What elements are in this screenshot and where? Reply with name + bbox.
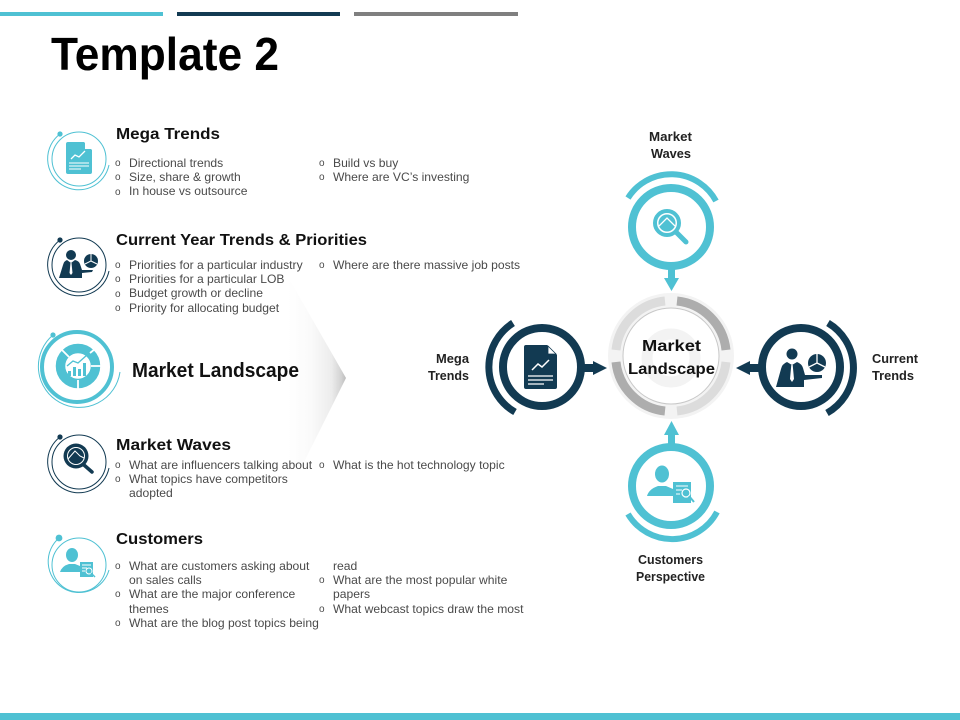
list: right column: What is the hot technology topic: [333, 458, 505, 472]
list: right column: [319, 156, 469, 184]
label: Waves: [651, 147, 691, 161]
chevron arrow: [288, 277, 346, 466]
node: mega trends: [428, 323, 607, 412]
list: right column: Where are VC’s investing: [333, 170, 469, 184]
label: Market: [649, 130, 693, 144]
list: right column: What webcast topics draw the most: [333, 602, 524, 616]
list: right column: Where are there massive job posts: [333, 258, 520, 272]
hub label: Market: [642, 338, 702, 355]
label: Mega: [436, 352, 470, 366]
list: left column: o: [115, 460, 121, 471]
icon: navy business person in rings: [48, 237, 109, 296]
label: [636, 553, 705, 584]
list: left column: What are the blog post topics being: [129, 616, 319, 630]
title: Template 2: [51, 28, 279, 80]
list: right column: Build vs buy: [333, 156, 399, 170]
list: left column: Priority for allocating budget: [129, 301, 280, 315]
list: right column: o: [319, 604, 325, 615]
icon: teal customer with document in rings: [48, 535, 109, 593]
list: left column: adopted: [129, 486, 173, 500]
icon: customer with document: [647, 466, 694, 503]
list: right column: papers: [333, 587, 370, 601]
list: left column: themes: [129, 602, 169, 616]
list: right column: o: [319, 260, 325, 271]
arrow: right to hub: [584, 361, 607, 375]
icon: teal donut chart in rings: [38, 332, 120, 407]
list: left column: Directional trends: [129, 156, 223, 170]
panel: current year trends and priorities: [48, 232, 520, 315]
icon: business person: [776, 348, 826, 387]
icon: magnifier: [655, 211, 686, 242]
arrow: up to hub: [664, 421, 679, 444]
arrow: down to hub: [664, 269, 679, 291]
panel: market waves: [48, 434, 505, 500]
label: Trends: [428, 369, 469, 383]
list: left column: on sales calls: [129, 573, 202, 587]
heading: Market Waves: [116, 437, 231, 454]
list: left column: In house vs outsource: [129, 184, 248, 198]
label: Trends: [872, 369, 914, 383]
diagram: market landscape hub: [428, 130, 919, 584]
list: right column: [319, 559, 524, 616]
list: left column: o: [115, 618, 121, 629]
heading: Customers: [116, 531, 203, 548]
list: right column: o: [319, 158, 325, 169]
list: left column: What are customers asking about: [129, 559, 310, 573]
list: left column: o: [115, 589, 121, 600]
list: left column: o: [115, 303, 121, 314]
list: left column: Size, share & growth: [129, 170, 241, 184]
list: left column: Priorities for a particular LOB: [129, 272, 284, 286]
icon: navy magnifier in rings: [48, 434, 109, 493]
list: left column: o: [115, 561, 121, 572]
label: [428, 352, 470, 383]
list: right column: o: [319, 575, 325, 586]
list: left column: Budget growth or decline: [129, 286, 263, 300]
list: left column: Priorities for a particular industry: [129, 258, 304, 272]
label: [872, 352, 919, 383]
list: left column: o: [115, 274, 121, 285]
hub label: Landscape: [628, 361, 715, 378]
list: right column: o: [319, 172, 325, 183]
label: Customers: [638, 553, 703, 567]
list: left column: [115, 258, 304, 315]
node: current trends: [736, 323, 919, 413]
label: Perspective: [636, 570, 705, 584]
node: market waves: [628, 130, 716, 291]
list: left column: What are influencers talking about: [129, 458, 313, 472]
panel: customers: [48, 531, 524, 630]
heading: Mega Trends: [116, 126, 220, 143]
node: customers perspective: [628, 421, 717, 584]
list: right column: What are the most popular white: [333, 573, 508, 587]
list: right column: read: [333, 559, 357, 573]
list: left column: [115, 156, 248, 198]
arrow: left to hub: [736, 361, 759, 375]
list: left column: [115, 458, 313, 500]
heading: Current Year Trends & Priorities: [116, 232, 367, 249]
panel: mega trends: [48, 126, 469, 198]
list: left column: [115, 559, 319, 630]
list: left column: o: [115, 158, 121, 169]
hub: central circle: [608, 293, 734, 419]
list: left column: o: [115, 260, 121, 271]
list: left column: What topics have competitors: [129, 472, 288, 486]
hub label: [628, 338, 715, 378]
list: left column: What are the major conference: [129, 587, 296, 601]
list: right column: o: [319, 460, 325, 471]
heading: Market Landscape: [132, 360, 299, 382]
bottom accent bar: [0, 713, 960, 720]
list: left column: o: [115, 474, 121, 485]
label: Current: [872, 352, 919, 366]
icon: teal document in rings: [48, 131, 109, 190]
list: left column: o: [115, 187, 121, 198]
list: left column: o: [115, 172, 121, 183]
list: left column: o: [115, 289, 121, 300]
icon: document: [524, 345, 557, 389]
label: [649, 130, 693, 161]
panel: market landscape: [38, 332, 299, 407]
top accent bars: [0, 12, 518, 16]
